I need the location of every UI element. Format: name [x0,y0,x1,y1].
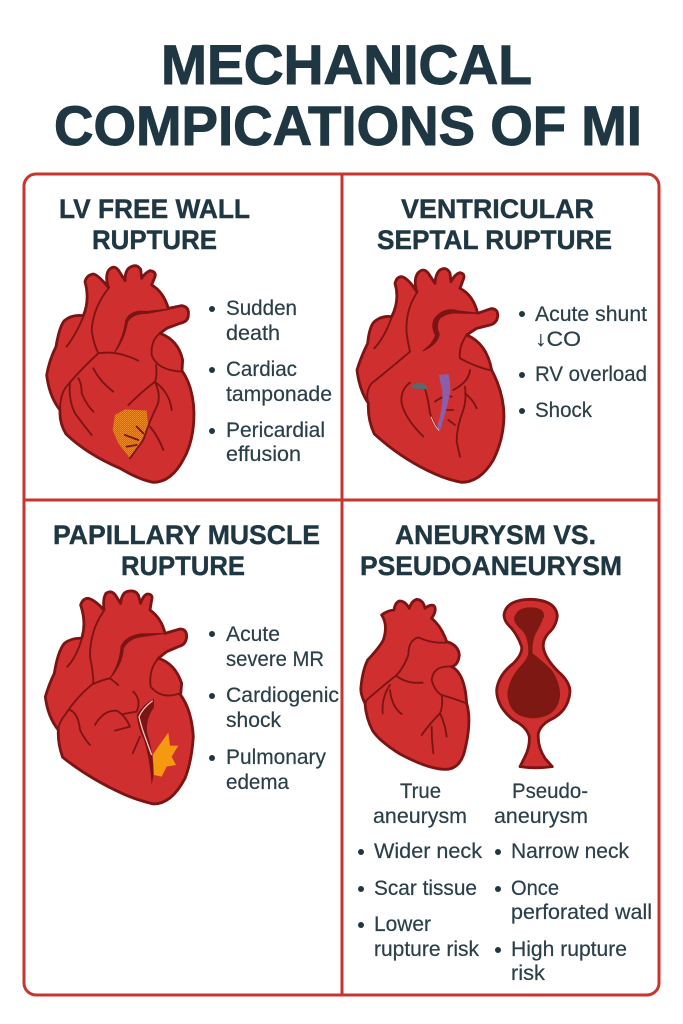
bullet list: pseudoaneurysm: High rupture [511,938,627,961]
panel: ventricular septal rupture [357,194,647,482]
icon: pseudoaneurysm [497,599,570,768]
bullet list: LV free wall rupture: effusion [226,443,301,466]
heading: LV free wall rupture: LV FREE WALL [59,194,250,224]
bullet list: pseudoaneurysm [495,840,652,985]
bullet list: pseudoaneurysm: perforated wall [511,901,652,924]
bullet list: true aneurysm: Lower [374,913,431,936]
heading: LV free wall rupture [59,194,250,255]
bullet list: papillary muscle rupture: Acute [226,623,280,646]
bullet list: pseudoaneurysm: Once [511,877,559,900]
panel grid frame [24,174,659,995]
heading: papillary muscle rupture [53,520,320,581]
heading: LV free wall rupture: RUPTURE [92,225,217,255]
bullet list: ventricular septal rupture: RV overload [535,363,647,386]
bullet list: papillary muscle rupture: Pulmonary [226,746,326,769]
caption: true aneurysm: aneurysm [373,805,467,828]
bullet list: LV free wall rupture: death [226,322,280,345]
heading: ventricular septal rupture [377,194,612,255]
caption: pseudoaneurysm: aneurysm [494,805,588,828]
icon: heart with free wall rupture [47,266,194,482]
heading: papillary muscle rupture: PAPILLARY MUSCLE [53,520,320,550]
heading: ventricular septal rupture: SEPTAL RUPTURE [377,225,612,255]
bullet list: papillary muscle rupture: Cardiogenic [226,684,339,707]
bullet list: LV free wall rupture: Cardiac [226,358,297,381]
bullet list: papillary muscle rupture [209,623,339,794]
heading: papillary muscle rupture: RUPTURE [121,551,245,581]
bullet list: LV free wall rupture: Pericardial [226,419,325,442]
bullet list: ventricular septal rupture: Shock [535,399,592,422]
bullet list: true aneurysm [358,840,483,961]
bullet list: ventricular septal rupture: Acute shunt [535,303,647,326]
bullet list: papillary muscle rupture: edema [226,771,289,794]
panel: aneurysm vs pseudoaneurysm [358,520,652,985]
bullet list: true aneurysm: Scar tissue [374,877,477,900]
heading: aneurysm vs pseudoaneurysm [360,520,622,581]
caption: true aneurysm [373,780,467,828]
heading: aneurysm vs pseudoaneurysm: ANEURYSM VS. [395,520,596,550]
bullet list: true aneurysm: Wider neck [374,840,483,863]
bullet list: LV free wall rupture [209,297,332,466]
title: MECHANICAL [161,33,532,96]
caption: true aneurysm: True [400,780,441,803]
bullet list: LV free wall rupture: tamponade [226,383,332,406]
bullet list: pseudoaneurysm: Narrow neck [511,840,629,863]
bullet list: LV free wall rupture: Sudden [226,297,297,320]
panel: LV free wall rupture [47,194,332,482]
bullet list: true aneurysm: rupture risk [374,938,479,961]
icon: heart with papillary muscle rupture [45,591,193,804]
icon: heart with septal rupture [357,269,504,482]
heading: ventricular septal rupture: VENTRICULAR [401,194,594,224]
bullet list: pseudoaneurysm: risk [511,962,546,985]
panel: papillary muscle rupture [45,520,339,804]
bullet list: papillary muscle rupture: severe MR [226,648,324,671]
caption: pseudoaneurysm: Pseudo- [512,780,588,803]
icon: true aneurysm heart [361,599,469,769]
bullet list: ventricular septal rupture: ↓CO [535,328,581,351]
bullet list: ventricular septal rupture [519,303,647,422]
title [54,33,642,157]
caption: pseudoaneurysm [494,780,588,828]
heading: aneurysm vs pseudoaneurysm: PSEUDOANEURYSM [360,551,622,581]
bullet list: papillary muscle rupture: shock [226,709,282,732]
title: COMPICATIONS OF MI [54,94,642,157]
